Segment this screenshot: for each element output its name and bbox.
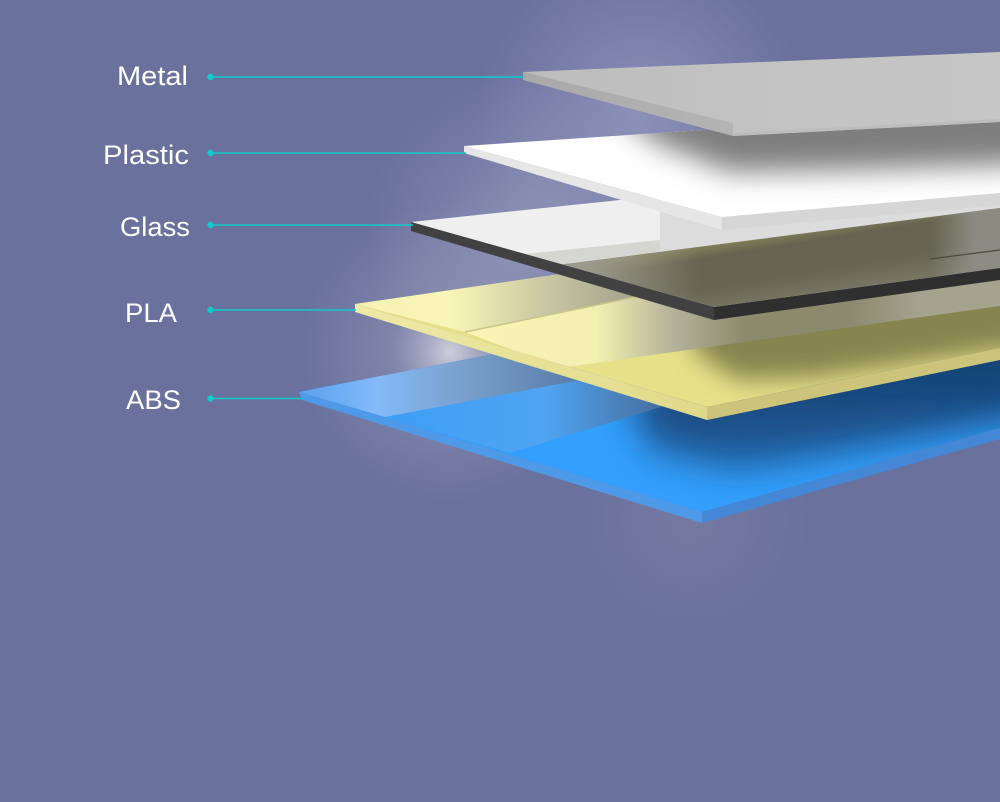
layer: Glass sheet: [411, 193, 1000, 320]
label: Glass: [120, 212, 413, 242]
label: ABS: [126, 385, 303, 415]
label: PLA: [125, 298, 356, 328]
layer: PLA sheet: [355, 268, 1000, 420]
label: PLA: PLA: [125, 298, 177, 328]
infographic: material layers: [105, 0, 1000, 538]
label: Plastic: [103, 140, 466, 170]
label: Glass: Glass: [120, 212, 190, 242]
layer: Metal sheet: [523, 52, 1000, 136]
label: Plastic: Plastic: [103, 140, 189, 170]
layer: Plastic sheet: [464, 122, 1000, 230]
label: Metal: Metal: [117, 61, 188, 91]
label: ABS: ABS: [126, 385, 181, 415]
layer: ABS sheet: [299, 348, 1000, 523]
label: Metal: [117, 61, 524, 91]
